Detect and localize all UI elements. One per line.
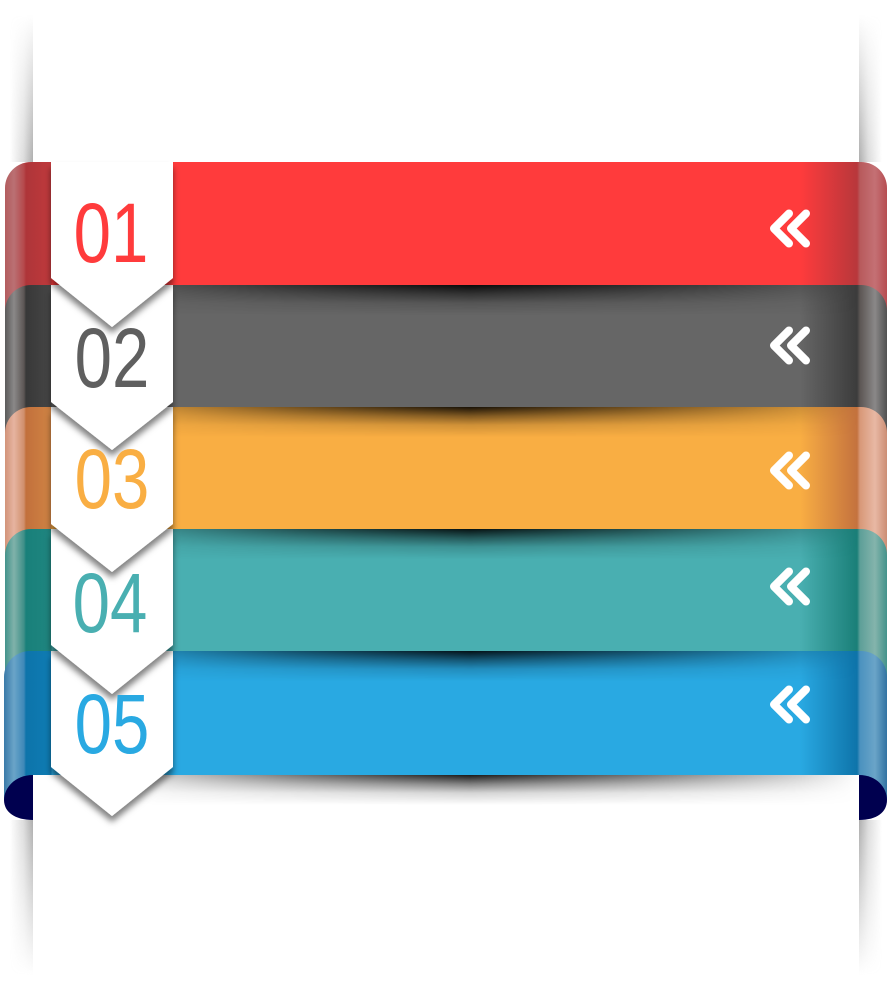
band 05 blue [4,651,887,800]
band 03 orange [5,407,887,560]
number 01: 01 [74,187,148,281]
tab 04 [51,529,173,694]
band 04 teal [5,529,887,680]
number 02: 02 [75,312,149,406]
tab 01 [51,162,173,327]
shadow under ribbon [149,775,848,802]
number 05: 05 [75,678,149,772]
icon: double chevron 03 [774,456,806,486]
tab 02 [51,285,173,450]
left ribbon curl [4,775,33,820]
icon: double chevron 02 [774,330,806,360]
tab 03 [51,407,173,572]
icon: double chevron 04 [774,572,806,602]
number 04: 04 [73,557,147,651]
right ribbon curl [859,775,887,820]
icon: double chevron 01 [774,214,806,244]
band 02 gray [5,285,887,440]
icon: double chevron 05 [774,690,806,720]
tab 05 [51,651,173,816]
band 01 red [5,162,887,320]
number 03: 03 [75,433,149,527]
